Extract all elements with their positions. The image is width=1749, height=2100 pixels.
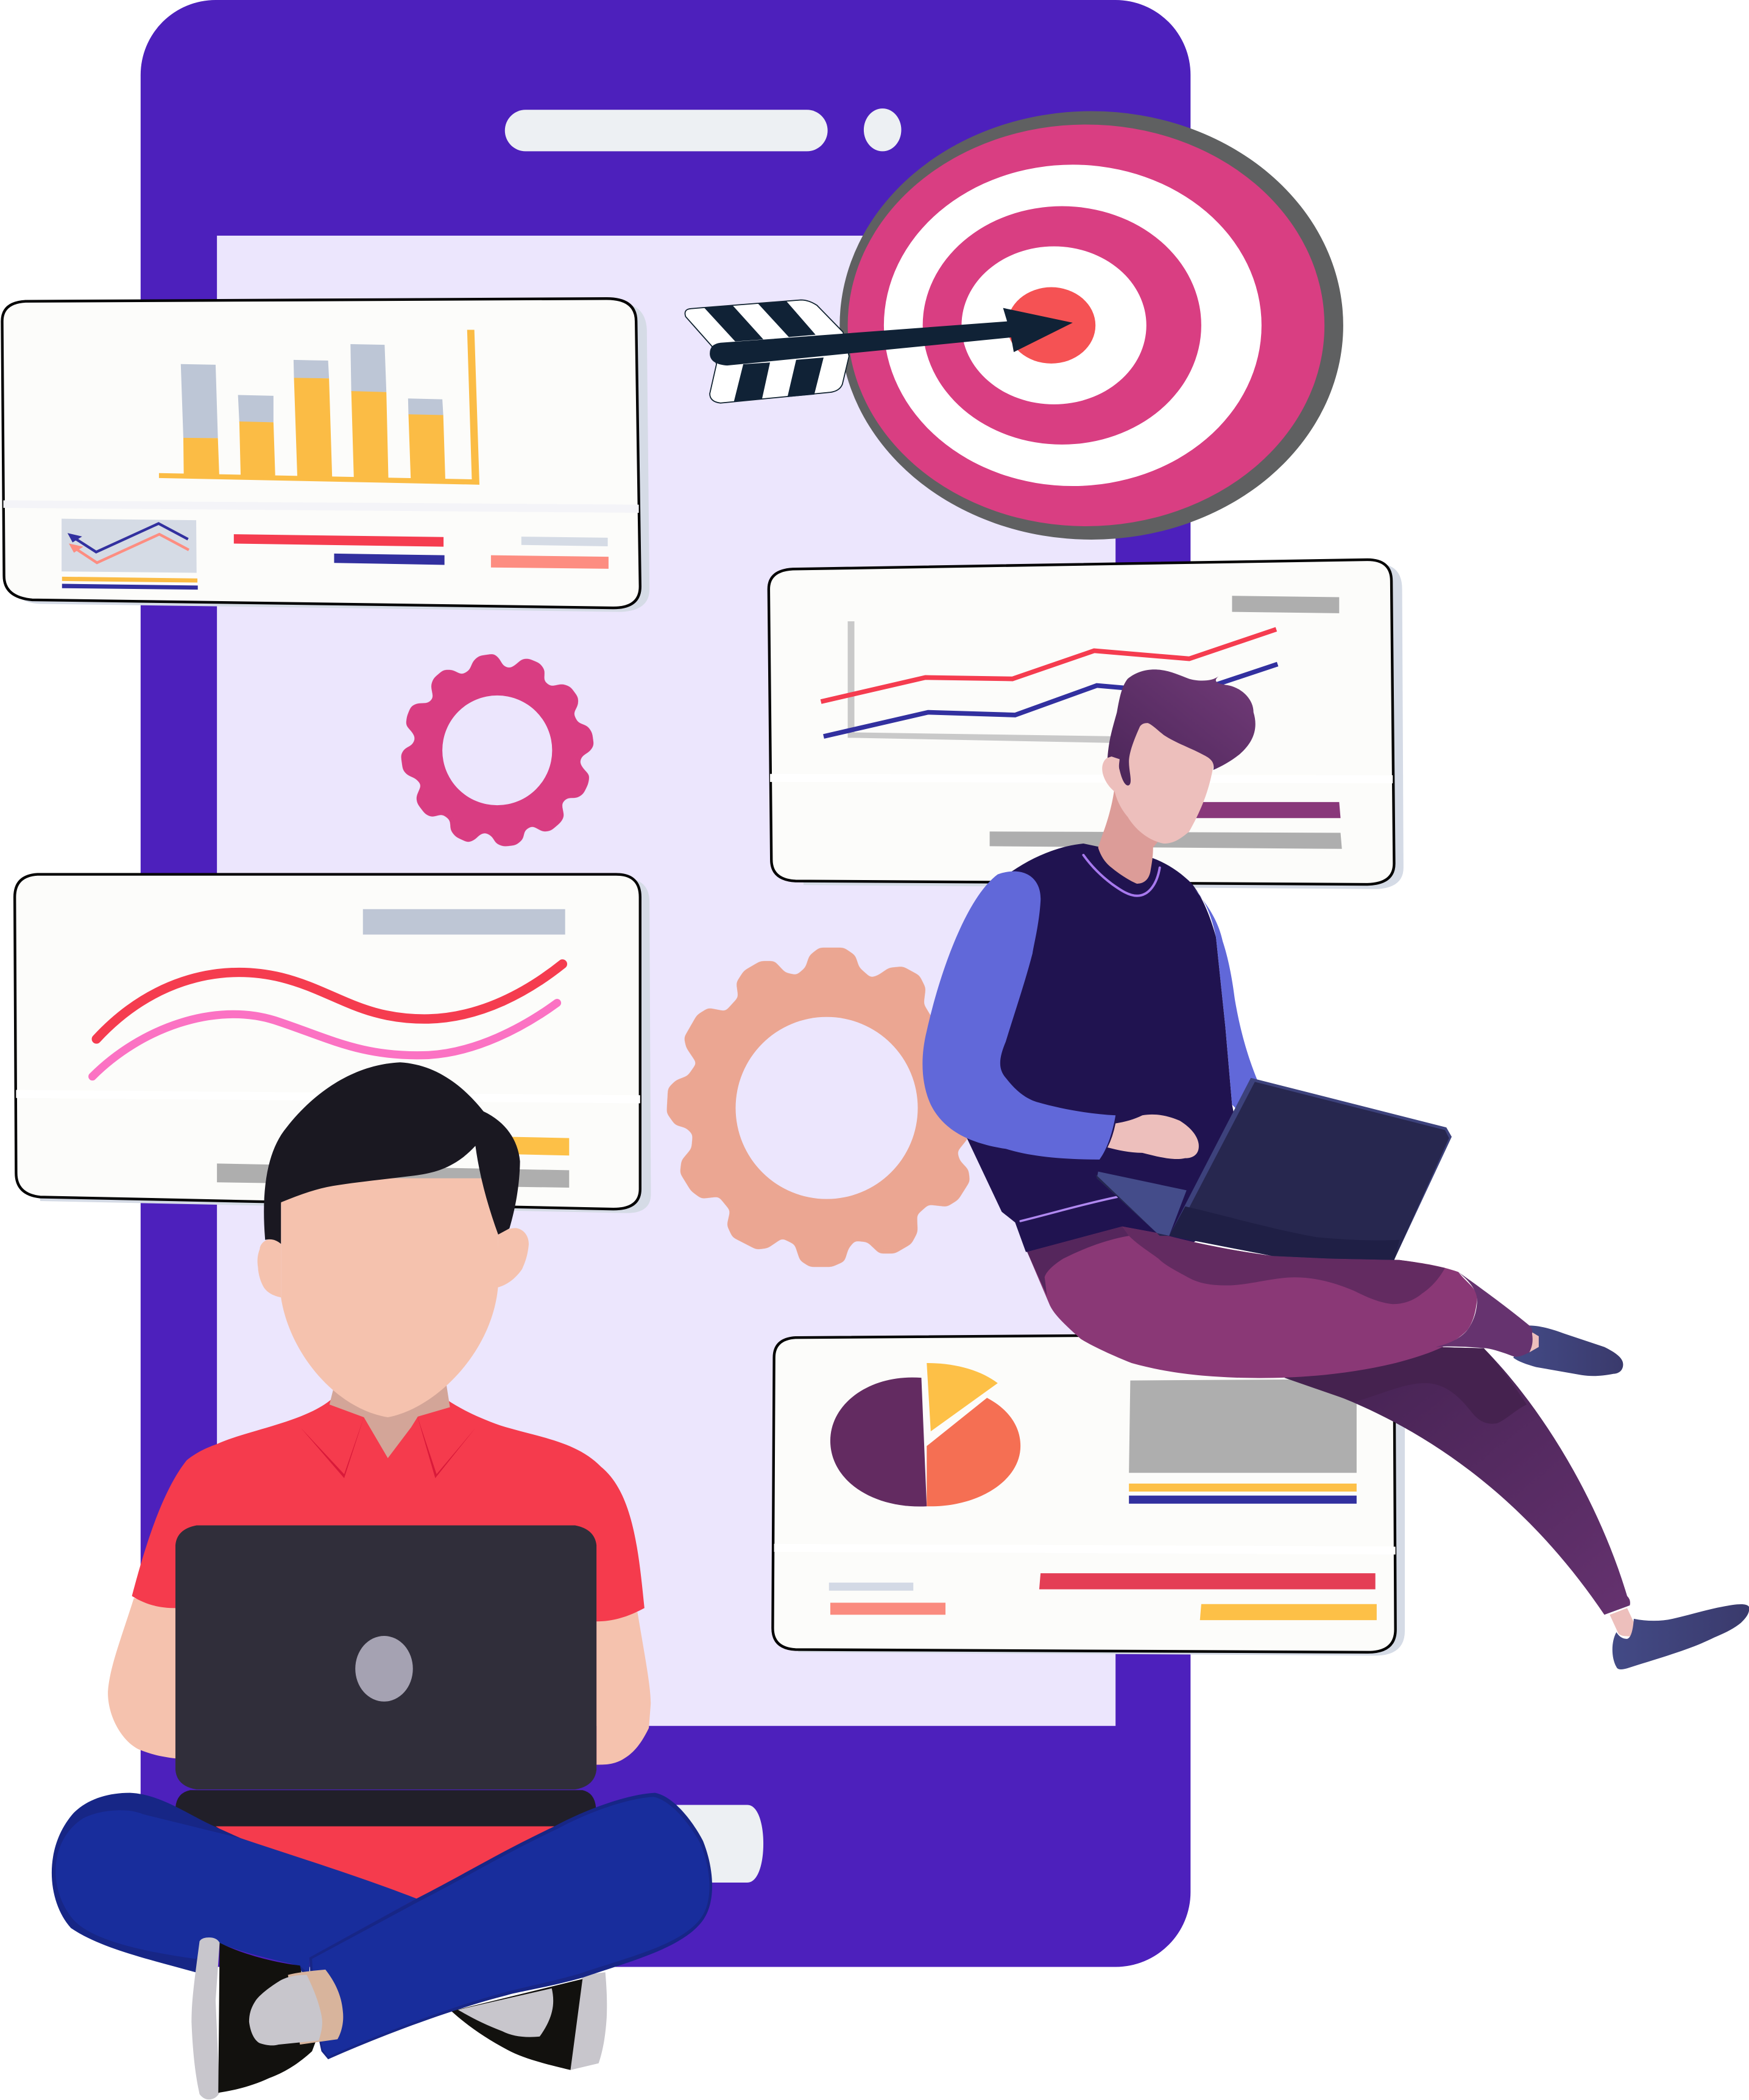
- collar: [1083, 855, 1160, 896]
- shoe right: [570, 1972, 607, 2070]
- sweater stripe: [1020, 1197, 1117, 1221]
- hair: [1108, 669, 1256, 786]
- front leg: [309, 1793, 712, 2059]
- calf: [1436, 1272, 1533, 1357]
- arms: [108, 1598, 175, 1758]
- pants: [1027, 1227, 1477, 1378]
- shoe left: [191, 1937, 220, 2099]
- shirt: [132, 1398, 645, 1767]
- neck: [1098, 790, 1179, 884]
- laptop: [175, 1525, 596, 1829]
- back leg shadow: [1284, 1347, 1527, 1424]
- front ankle: [1529, 1332, 1539, 1352]
- back leg: [1284, 1347, 1630, 1615]
- phone home button: [670, 1805, 763, 1883]
- line chart: [821, 621, 1277, 743]
- gear hole: [736, 1017, 918, 1199]
- laptop base: [175, 1790, 596, 1829]
- back arm: [1195, 889, 1257, 1112]
- back ankle: [1609, 1608, 1636, 1637]
- foot: [249, 1975, 322, 2045]
- bar chart: [159, 329, 479, 485]
- laptop logo: [355, 1636, 413, 1702]
- laptop keyboard: [1097, 1172, 1187, 1236]
- pie chart: [830, 1363, 1020, 1507]
- arrow: [685, 300, 1073, 403]
- collar: [301, 1417, 475, 1478]
- bars: [234, 534, 443, 547]
- ear: [1102, 756, 1128, 791]
- icon: pink gear: [401, 655, 593, 845]
- phone speaker: [505, 110, 828, 151]
- front arm: [922, 872, 1115, 1160]
- torso: [967, 844, 1252, 1252]
- panel: curves card: [15, 875, 651, 1213]
- panel: line chart card: [769, 560, 1404, 889]
- pants shadow top: [1122, 1227, 1445, 1304]
- back shoe: [1613, 1604, 1749, 1669]
- phone screen: [217, 236, 1115, 1726]
- panel: bar chart card: [2, 298, 649, 612]
- hand: [1108, 1115, 1199, 1159]
- head: [1114, 710, 1214, 844]
- head: [281, 1179, 498, 1417]
- panel: pie chart card: [772, 1334, 1405, 1655]
- target: [839, 111, 1343, 540]
- laptop: [1095, 1078, 1452, 1260]
- icon: salmon gear: [668, 949, 971, 1266]
- gear hole: [442, 696, 552, 805]
- hair: [264, 1062, 520, 1244]
- back leg: [52, 1793, 417, 1982]
- person: man sitting right with laptop: [922, 669, 1749, 1669]
- phone camera: [864, 108, 901, 151]
- pants shadow left: [1027, 1227, 1129, 1296]
- phone body: [141, 0, 1190, 1967]
- person: man sitting front with laptop: [52, 1062, 712, 2099]
- front shoe: [1513, 1325, 1623, 1376]
- neck: [330, 1382, 450, 1458]
- ears: [258, 1239, 281, 1297]
- curved lines: [96, 964, 562, 1039]
- mini line chart: [62, 519, 198, 590]
- shirt lower: [216, 1827, 554, 1908]
- ankle cuff: [288, 1970, 343, 2045]
